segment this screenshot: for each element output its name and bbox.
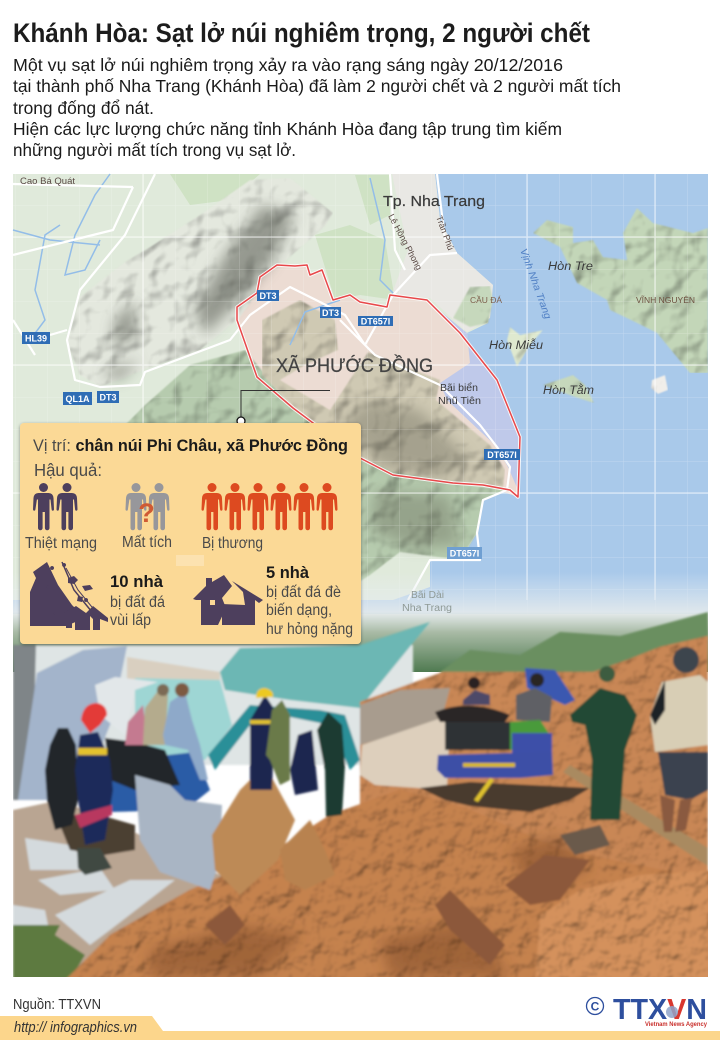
person: green raincoat bbox=[317, 712, 345, 817]
intro text block bbox=[13, 55, 621, 160]
photo: white sheet debris bbox=[360, 715, 450, 790]
icon labels bbox=[25, 534, 263, 552]
person: pink shirt bbox=[125, 705, 148, 745]
map: place labels: Hòn Miễu bbox=[489, 339, 544, 352]
photo: dark gap under excavator bbox=[420, 782, 590, 812]
icon: landslide burying houses bbox=[30, 562, 108, 630]
photo: plank bbox=[563, 765, 708, 866]
person: grey shirt worker bbox=[516, 673, 552, 722]
faded road label bbox=[176, 555, 204, 566]
map: commune hill shading bbox=[340, 400, 470, 548]
photo: left shed wall bbox=[13, 645, 36, 800]
photo: teal building wall bbox=[135, 678, 232, 760]
icon: two dead bbox=[33, 483, 78, 530]
photo: foreground shadows bbox=[150, 835, 590, 977]
10 houses text: 10 nhà bbox=[110, 572, 164, 591]
copyright mark: C bbox=[591, 1000, 600, 1014]
source: Nguồn: TTXVN bbox=[13, 996, 101, 1013]
map: Hon Tre island bbox=[533, 208, 708, 373]
photo: forest bushes bbox=[439, 611, 708, 674]
photo: white cab bbox=[94, 676, 158, 724]
intro text block: Một vụ sạt lở núi nghiêm trọng xảy ra vào rạng sáng ngày 20/12/2016 bbox=[13, 55, 563, 75]
photo: cream wall bbox=[126, 656, 221, 680]
title: Khánh Hòa: Sạt lở núi nghiêm trọng, 2 người chết bbox=[13, 18, 590, 48]
person: khaki shirt bbox=[143, 688, 168, 745]
map: mountain shading bbox=[100, 205, 295, 380]
photo: foreground dirt bbox=[162, 804, 360, 906]
photo: large right boulder bbox=[535, 870, 712, 980]
photo: backdrop bbox=[13, 645, 413, 765]
map: small islands bbox=[453, 286, 668, 403]
photo: blue excavator rear bbox=[435, 706, 553, 802]
footer ribbon bbox=[0, 1016, 720, 1040]
photo: white concrete slabs bbox=[13, 838, 175, 945]
map: place labels: Vịnh Nha Trang bbox=[517, 247, 553, 321]
map: mountains in commune bbox=[262, 300, 505, 488]
footer link: http:// infographics.vn bbox=[14, 1019, 137, 1036]
map: road label text: QL1A bbox=[65, 394, 90, 404]
5 houses text: bị đất đá đè bbox=[266, 584, 341, 601]
map: place labels bbox=[20, 176, 695, 407]
map: city area bbox=[392, 174, 493, 332]
map: sea bbox=[13, 174, 708, 614]
map: road label text bbox=[25, 291, 517, 558]
icon labels: Bị thương bbox=[202, 535, 263, 552]
map: white roads bbox=[13, 174, 510, 600]
callout line bbox=[237, 390, 330, 425]
5 houses text: 5 nhà bbox=[266, 563, 310, 582]
map: road label text: DT657I bbox=[361, 316, 390, 326]
icon: two missing bbox=[126, 483, 170, 530]
photo: dirt slope texture bbox=[360, 638, 708, 872]
intro text block: những người mất tích trong vụ sạt lở. bbox=[13, 140, 296, 160]
faded map labels bbox=[402, 590, 452, 614]
map: sea inside commune bbox=[427, 300, 520, 490]
map: place labels: Bãi biển bbox=[440, 382, 478, 394]
map: place labels: Tp. Nha Trang bbox=[383, 193, 485, 210]
photo: grass bbox=[13, 925, 85, 980]
intro text block: trong đống đổ nát. bbox=[13, 98, 154, 118]
map: green patches bbox=[170, 174, 395, 300]
faded map labels: Bãi Dài bbox=[411, 590, 444, 601]
map: road label text: DT657I bbox=[487, 450, 517, 460]
icon: collapsed house bbox=[193, 575, 263, 625]
map: grid lines bbox=[13, 174, 708, 614]
map: rivers bbox=[13, 174, 395, 345]
photo: scattered bricks bbox=[205, 825, 610, 965]
map: road label boxes bbox=[22, 290, 520, 559]
map: road label text: DT657I bbox=[450, 548, 479, 558]
person: beige jacket bbox=[650, 647, 708, 832]
map: mountain range north west bbox=[67, 178, 333, 387]
map: road label text: HL39 bbox=[25, 334, 47, 344]
photo: left rubble bbox=[13, 802, 222, 968]
map: place labels: Hòn Tằm bbox=[543, 384, 594, 397]
intro text block: tại thành phố Nha Trang (Khánh Hòa) đã làm 2 người chết và 2 người mất tích bbox=[13, 76, 621, 96]
icon: six injured bbox=[202, 483, 338, 530]
map: place labels: Nhũ Tiên bbox=[438, 396, 481, 407]
10 houses text bbox=[110, 572, 165, 629]
5 houses text bbox=[266, 563, 353, 638]
person: purple shirt bbox=[463, 677, 490, 705]
map: place labels: Cao Bá Quát bbox=[20, 176, 75, 187]
photo: corrugated metal bbox=[18, 646, 127, 800]
icon labels: Thiệt mạng bbox=[25, 535, 97, 552]
photo: engine dark bbox=[105, 738, 180, 790]
person: kneeling crew bbox=[290, 730, 318, 795]
map: place labels: Trần Phú bbox=[434, 214, 456, 252]
10 houses text: vùi lấp bbox=[110, 612, 151, 629]
person: firefighter with red helmet bbox=[75, 703, 113, 875]
map: road label text: DT3 bbox=[259, 291, 277, 301]
map: place labels: XÃ PHƯỚC ĐỒNG bbox=[276, 355, 433, 377]
logo: TTXVN bbox=[586, 994, 707, 1028]
map: place labels: Lê Hồng Phong bbox=[386, 212, 424, 272]
map: land west bbox=[13, 174, 508, 600]
logo tagline: Vietnam News Agency bbox=[645, 1021, 707, 1028]
map: road label text: DT3 bbox=[99, 392, 117, 402]
logo letters: TTXVN bbox=[613, 994, 707, 1026]
map: road label text: DT3 bbox=[322, 308, 339, 318]
map: mountains south bbox=[20, 350, 507, 620]
photo: people seated bbox=[125, 683, 208, 780]
photo: teal roof bbox=[220, 622, 430, 708]
photo: blue tarp bbox=[525, 668, 575, 705]
icon: two missing: ? bbox=[138, 498, 155, 528]
10 houses text: bị đất đá bbox=[110, 594, 165, 611]
photo: excavator tracks bbox=[60, 815, 135, 855]
faded map labels: Nha Trang bbox=[402, 603, 452, 614]
map-to-photo fade bbox=[13, 572, 708, 672]
map: place labels: VĨNH NGUYÊN bbox=[636, 296, 695, 305]
map: place labels: CẦU ĐÁ bbox=[470, 295, 503, 305]
person: army uniform bbox=[266, 700, 290, 785]
person: green uniform bbox=[570, 666, 637, 820]
panel: consequences card bbox=[20, 423, 361, 644]
5 houses text: biến dạng, bbox=[266, 602, 332, 619]
intro text block: Hiện các lực lượng chức năng tỉnh Khánh Hòa đang tập trung tìm kiếm bbox=[13, 119, 562, 139]
photo: dirt slope right bbox=[359, 636, 708, 870]
person: police officer bbox=[45, 728, 78, 830]
photo: firefighter yellow helmet bbox=[250, 688, 275, 790]
map: major grid lines bbox=[13, 174, 708, 600]
card background bbox=[20, 423, 361, 644]
person: striped shirt bbox=[163, 692, 208, 780]
photo: blue machinery bbox=[110, 745, 210, 812]
icon labels: Mất tích bbox=[122, 534, 172, 551]
map: commune area bbox=[237, 265, 520, 497]
photo: teal excavator arm bbox=[208, 705, 360, 770]
photo: foreground dirt texture bbox=[65, 790, 712, 980]
photo: metal sheet bbox=[135, 775, 222, 890]
5 houses text: hư hỏng nặng bbox=[266, 621, 353, 638]
map bbox=[13, 174, 708, 620]
photo: large broken wall block bbox=[212, 765, 295, 895]
photo: roof debris bbox=[360, 688, 450, 745]
map: place labels: Hòn Tre bbox=[548, 261, 593, 273]
map: commune boundary bbox=[237, 265, 520, 497]
logo globe bbox=[666, 1006, 678, 1018]
consequences label: Hậu quả: bbox=[34, 460, 102, 480]
location line: Vị trí: chân núi Phi Châu, xã Phước Đồng bbox=[33, 436, 348, 455]
photo: rescue scene bbox=[13, 612, 712, 980]
photo: second block bbox=[280, 820, 335, 890]
